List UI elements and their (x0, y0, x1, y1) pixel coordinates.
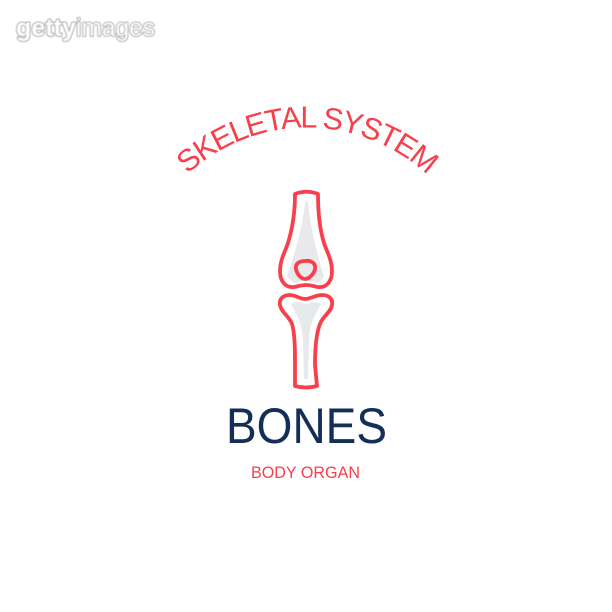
tibia outline (280, 295, 332, 388)
icon: knee joint bones (280, 192, 332, 388)
title: bones: BONES (226, 398, 387, 454)
watermark: gettyimages (16, 14, 155, 42)
heading: skeletal system: SKELETAL SYSTEM (178, 106, 439, 174)
femur outline (280, 192, 332, 287)
femur inner shading (287, 202, 324, 283)
watermark: gettyimages: images (76, 14, 155, 42)
patella outline (296, 261, 315, 279)
watermark: gettyimages: getty (16, 14, 76, 42)
tibia inner shading (291, 302, 321, 379)
subtitle: body organ: BODY ORGAN (251, 463, 360, 482)
